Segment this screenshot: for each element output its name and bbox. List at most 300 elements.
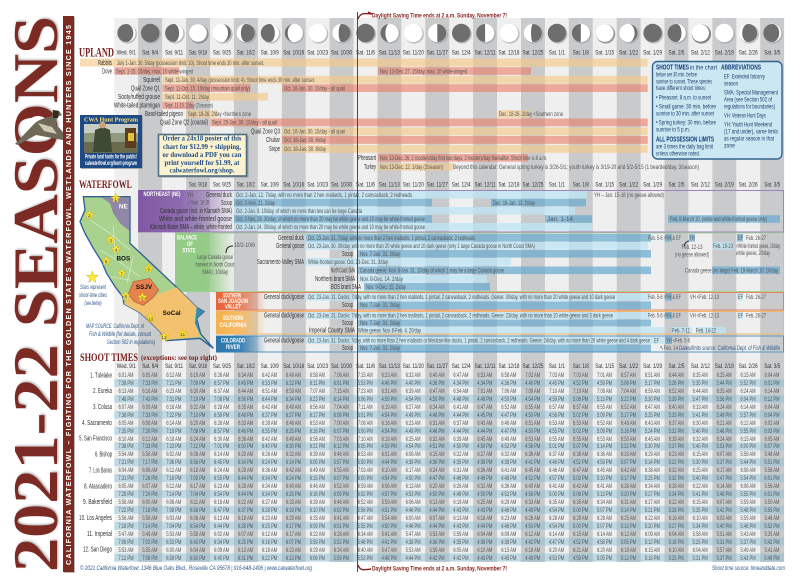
times: Tulelake: 4:45 PM — [549, 380, 565, 387]
times: Tulelake: 4:46 PM — [382, 380, 397, 387]
times: Colusa: 6:08 PM — [334, 412, 349, 419]
panel: southern california: White geese: Nov. 6-Feb. 4. 20/day — [358, 327, 422, 334]
upland labels and text: Rabbits — [98, 60, 112, 67]
times: Eureka: 5:39 PM — [669, 396, 684, 403]
times: Colusa: 6:59 PM — [214, 412, 230, 419]
panel: southern san joaquin valley: SAN JOAQUIN — [218, 299, 248, 305]
times: Atascadero: 6:20 AM — [430, 483, 445, 490]
times: Los Banos: 5:40 PM — [693, 475, 708, 482]
times: San Francisco: 7:01 PM — [214, 443, 230, 450]
times: Colusa: 6:42 AM — [262, 404, 277, 411]
times: Eureka: 7:15 AM — [334, 388, 349, 395]
times: Bishop: 6:14 AM — [214, 451, 229, 458]
times: Atascadero: 6:42 AM — [573, 483, 588, 490]
times: Sacramento: 6:23 AM — [406, 420, 421, 427]
times: Los Banos: 5:54 PM — [741, 475, 756, 482]
times: Imperial: 5:25 PM — [693, 539, 708, 546]
waterfowl date header: Sat. 1/29 — [643, 182, 662, 188]
times: San Diego: 5:59 PM — [334, 555, 349, 562]
times: Eureka: 5:47 PM — [693, 396, 708, 403]
times: Bishop: 4:39 PM — [406, 459, 421, 466]
times: Bakersfield: 6:00 AM — [143, 499, 158, 506]
times: Sacramento: 7:35 PM — [119, 428, 134, 435]
times: Los Angeles: 4:54 PM — [549, 523, 565, 530]
times: Bakersfield: 5:59 AM — [382, 499, 397, 506]
shoot times date header: Sat. 9/25 — [213, 363, 231, 370]
times: Atascadero: 6:09 PM — [334, 491, 349, 498]
times: Imperial: 6:43 PM — [190, 539, 206, 546]
times: Los Angeles: 5:07 PM — [597, 523, 612, 530]
times: San Francisco: 6:53 AM — [597, 436, 612, 442]
times: San Francisco: 7:33 PM — [143, 443, 158, 450]
times: Tulelake: 5:35 PM — [693, 380, 708, 387]
times: Eureka: 7:08 PM — [214, 396, 230, 403]
times: Colusa: 5:09 PM — [597, 412, 612, 419]
panel: balance of state: EF — [738, 235, 743, 242]
map: california hunting zones: 7 — [120, 271, 123, 276]
times: Los Banos: 6:18 AM — [191, 467, 206, 474]
times: Los Banos: 6:41 AM — [502, 467, 517, 474]
times: San Francisco: 6:56 AM — [310, 436, 325, 442]
times: Imperial: 6:15 AM — [573, 531, 588, 538]
times: Imperial: 6:34 PM — [214, 539, 230, 546]
times: San Francisco: 4:59 PM — [382, 443, 397, 450]
times: Colusa: 7:38 PM — [119, 412, 134, 419]
heading: waterfowl: WATERFOWL — [79, 177, 132, 191]
times: Colusa: 4:49 PM — [406, 412, 421, 419]
upland labels and text: Quail Zone Q1 — [131, 85, 160, 92]
times: Sacramento: 5:16 PM — [621, 428, 636, 435]
times: San Diego: 4:49 PM — [525, 555, 541, 562]
times: Colusa: 4:54 PM — [382, 412, 397, 419]
upland season bars — [80, 58, 648, 171]
times: Bishop: 5:57 PM — [334, 459, 349, 466]
upland date header: Sat. 2/12 — [691, 50, 710, 56]
callout: order poster — [158, 134, 248, 178]
times: Los Angeles: 6:17 PM — [286, 523, 301, 530]
times: San Francisco: 4:50 PM — [454, 443, 469, 450]
waterfowl date header: Sat. 10/30 — [331, 182, 352, 188]
times: Eureka: 5:30 PM — [645, 396, 660, 403]
times: Bakersfield: 6:52 AM — [358, 499, 373, 506]
times: Los Angeles: 6:29 AM — [286, 515, 301, 522]
times: Eureka: 6:24 AM — [741, 388, 756, 395]
panel: northeast — [138, 190, 783, 232]
times: Los Banos: 7:26 PM — [143, 475, 158, 482]
times: Los Angeles: 5:46 PM — [741, 523, 756, 530]
panel: northeast: NORTHEAST (NE) — [144, 192, 180, 198]
times: Los Angeles: 4:43 PM — [454, 523, 469, 530]
panel: southern california: SOUTHERN — [223, 316, 243, 322]
heading: shoot times: (exceptions: see top right) — [141, 353, 217, 362]
times: Sacramento: 6:43 AM — [645, 420, 660, 427]
panel: cwa hunt program: calwaterfowl.org/hunt-program — [85, 161, 137, 167]
times: Imperial: 6:07 PM — [286, 539, 301, 546]
times: Bakersfield: 6:29 AM — [502, 499, 517, 506]
panel: southern california: Scoup — [342, 320, 353, 327]
panel: shoot times and abbreviations: sunrise to 5 p.m. — [656, 126, 690, 133]
times: Colusa: 6:49 AM — [286, 404, 301, 411]
panel: balance of state: (no geese allowed) — [675, 252, 709, 258]
times: Bishop: 6:05 PM — [310, 459, 325, 466]
times: Los Banos: 4:47 PM — [430, 475, 445, 482]
times: Bakersfield: 6:19 PM — [286, 507, 301, 514]
shoot time city names: 12. San Diego — [83, 547, 112, 554]
times: San Francisco: 5:22 PM — [621, 443, 636, 450]
times: Eureka: 7:31 PM — [166, 396, 182, 403]
times: Tulelake: 5:44 PM — [717, 380, 732, 387]
upland labels and text: Sept. 11-19. 2/day (2/season) — [165, 102, 213, 109]
times: Atascadero: 6:14 AM — [717, 483, 732, 490]
times: Bakersfield: 6:34 AM — [597, 499, 612, 506]
times: San Francisco: 6:45 AM — [478, 436, 493, 442]
times: Eureka: 6:39 AM — [406, 388, 421, 395]
times: Eureka: 6:52 AM — [669, 388, 684, 395]
times: San Francisco: 6:39 AM — [669, 436, 684, 442]
times: Bishop: 6:15 AM — [693, 451, 708, 458]
times: Tulelake: 4:52 PM — [573, 380, 588, 387]
waterfowl date header: Sat. 1/22 — [619, 182, 638, 188]
panel: balance of state: White-fronted goose: Oct. 23-Dec. 31. 3/day — [308, 259, 389, 266]
times: Atascadero: 7:24 PM — [143, 491, 158, 498]
times: Tulelake: 7:33 PM — [143, 380, 158, 387]
times: Atascadero: 5:20 PM — [621, 491, 636, 498]
upland date header: Sat. 10/30 — [331, 50, 352, 56]
times: Bishop: 6:56 PM — [190, 459, 206, 466]
times: Bakersfield: 5:48 PM — [741, 507, 756, 514]
panel: southern california: Feb. 14-22 — [696, 327, 716, 334]
times: Los Angeles: 7:04 PM — [166, 523, 182, 530]
times: Los Banos: 5:47 PM — [717, 475, 732, 482]
times: Sacramento: 7:19 PM — [166, 428, 182, 435]
times: San Francisco: 6:24 AM — [717, 436, 732, 442]
times: Bakersfield: 6:35 AM — [573, 499, 588, 506]
times: San Diego: 5:37 PM — [717, 555, 732, 562]
times: Atascadero: 6:16 PM — [310, 491, 325, 498]
times: Imperial: 5:18 PM — [669, 539, 684, 546]
upland labels and text: Pheasant — [358, 155, 376, 162]
times: Tulelake: 4:34 PM — [478, 380, 493, 387]
times: Bishop: 5:07 PM — [621, 459, 636, 466]
shoot times date header: Sat. 1/1 — [549, 363, 565, 370]
times: Los Banos: 6:24 PM — [286, 475, 301, 482]
times: Atascadero: 6:44 PM — [238, 491, 253, 498]
times: Eureka: 7:10 AM — [573, 388, 588, 395]
times: San Francisco: 6:40 PM — [262, 443, 277, 450]
times: Sacramento: 6:48 AM — [502, 420, 517, 427]
panel: balance of state: Feb. 5-6 >YH & EF — [648, 235, 681, 242]
upland labels and text: Oct. 16-Jan. 30. 8/day — [284, 146, 327, 153]
times: Los Banos: 5:25 PM — [645, 475, 660, 482]
panel: shoot times and abbreviations: Area (see Section 502 of — [724, 96, 772, 103]
times: Los Angeles: 6:35 AM — [310, 515, 325, 522]
times: San Diego: 7:12 PM — [119, 555, 134, 562]
times: Tulelake: 6:45 PM — [238, 380, 253, 387]
times: Atascadero: 6:41 AM — [597, 483, 612, 490]
times: Tulelake: 7:38 PM — [119, 380, 134, 387]
map notes: Stars represent — [80, 285, 106, 291]
times: San Francisco: 6:05 AM — [765, 436, 780, 442]
times: Los Banos: 6:25 AM — [693, 467, 708, 474]
times: Colusa: 7:04 AM — [334, 404, 349, 411]
times: Atascadero: 5:27 PM — [645, 491, 660, 498]
times: Los Banos: 5:32 PM — [669, 475, 684, 482]
times: Colusa: 6:01 PM — [358, 412, 373, 419]
times: Tulelake: 7:15 AM — [358, 372, 373, 379]
times: Los Angeles: 6:22 AM — [645, 515, 660, 522]
waterfowl date header: Sat. 10/16 — [283, 182, 304, 188]
times: Imperial: 6:14 AM — [597, 531, 612, 538]
times: Bakersfield: 5:21 PM — [645, 507, 660, 514]
times: Los Angeles: 6:54 PM — [190, 523, 206, 530]
times: Eureka: 6:04 PM — [741, 396, 756, 403]
times: Bakersfield: 5:00 PM — [573, 507, 588, 514]
times: Sacramento: 6:46 AM — [286, 420, 301, 427]
panel: shoot times and abbreviations: as regular season in that — [724, 135, 774, 142]
times: Colusa: 4:46 PM — [430, 412, 445, 419]
times: San Francisco: 6:32 AM — [693, 436, 708, 442]
times: Los Banos: 4:50 PM — [406, 475, 421, 482]
times: Colusa: 6:27 PM — [286, 412, 301, 419]
times: Sacramento: 6:53 AM — [310, 420, 325, 427]
times: Los Angeles: 6:10 AM — [693, 515, 708, 522]
times: Atascadero: 6:07 AM — [143, 483, 158, 490]
times: Tulelake: 6:53 AM — [478, 372, 493, 379]
times: Tulelake: 7:03 AM — [549, 372, 564, 379]
times: Los Banos: 6:12 AM — [167, 467, 182, 474]
times: Imperial: 6:12 AM — [525, 531, 540, 538]
map notes: (see below) — [84, 301, 102, 307]
panel: shoot times and abbreviations: ABBREVIATIONS — [721, 64, 761, 71]
panel: northeast: Oct. 2-Jan. 14. 30/day, of which no more than 20 may be white geese and 10 may be white-fronted goose — [236, 224, 425, 231]
times: Sacramento: 7:00 AM — [334, 420, 349, 427]
times: Sacramento: 6:35 PM — [262, 428, 277, 435]
times: Los Banos: 4:57 PM — [549, 475, 565, 482]
times: Eureka: 5:13 PM — [597, 396, 612, 403]
map: california hunting zones: 5 — [105, 259, 108, 264]
times: Los Banos: 6:46 AM — [549, 467, 564, 474]
times: Los Banos: 6:17 AM — [406, 467, 421, 474]
times: Eureka: 6:44 AM — [238, 388, 253, 395]
times: San Francisco: 6:50 AM — [621, 436, 636, 442]
times: Los Banos: 6:17 AM — [717, 467, 732, 474]
times: Bakersfield: 4:51 PM — [382, 507, 397, 514]
times: Los Banos: 5:03 PM — [573, 475, 588, 482]
times: Bishop: 5:56 AM — [143, 451, 158, 458]
times: Colusa: 6:55 AM — [525, 404, 540, 411]
times: San Diego: 6:15 AM — [502, 547, 517, 554]
panel: shoot times and abbreviations: • Pheasant: 8 a.m. to sunset — [656, 94, 711, 101]
times: Los Banos: 6:04 AM — [119, 467, 134, 474]
times: Bakersfield: 4:43 PM — [454, 507, 469, 514]
times: Tulelake — [118, 372, 780, 387]
times: Colusa: 5:49 PM — [717, 412, 732, 419]
map: california hunting zones: 1 — [114, 196, 117, 201]
times: San Francisco: 6:05 PM — [358, 443, 373, 450]
times: San Diego: 6:10 AM — [478, 547, 493, 554]
times: Sacramento: 7:08 AM — [358, 420, 373, 427]
upland labels and text: Oct. 16-Jan. 30. 10/day - all quail — [284, 128, 345, 136]
panel: balance of state — [175, 233, 784, 292]
times: San Diego: 6:34 AM — [334, 547, 349, 554]
panel: southern san joaquin valley: Oct. 23-Jan. 31. Ducks: 7/day, with no more than 2 hen mallards, 1 pintail, 2 canvasback, 2 redheads. Geese: 30/day, with no more than 20 white geese and 10 dark geese — [308, 294, 615, 301]
shoot times date header: Sat. 12/18 — [498, 363, 520, 370]
times: Los Banos: 6:49 AM — [310, 467, 325, 474]
times: Los Banos: 6:24 AM — [430, 467, 445, 474]
times: Sacramento: 6:33 AM — [238, 420, 253, 427]
panel: southern san joaquin valley: Feb. 5-6 >YH & EF — [648, 294, 681, 301]
callout: order poster: chart for $12.99 + shipping, — [163, 144, 241, 151]
times: Eureka: 4:59 PM — [549, 396, 565, 403]
panel: balance of state: Feb. 26-27 — [746, 235, 766, 242]
times: San Diego: 5:57 AM — [717, 547, 732, 554]
waterfowl date header: Sat. 2/19 — [715, 182, 734, 188]
times: Atascadero: 6:28 AM — [669, 483, 684, 490]
times: San Diego: 4:53 PM — [549, 555, 565, 562]
times: Bishop: 4:35 PM — [454, 459, 469, 466]
times: Sacramento: 6:14 AM — [167, 420, 182, 427]
panel: northeast: White and white-fronted goose — [159, 216, 232, 223]
upland labels and text: Sept. 18-26. 2/day <Northern zone — [188, 111, 251, 118]
shoot times date header: Sat. 12/11 — [475, 363, 496, 370]
times: Los Banos: 5:17 PM — [621, 475, 636, 482]
times: Los Angeles: 6:23 AM — [262, 515, 277, 522]
panel: southern san joaquin valley — [216, 292, 784, 310]
times: Los Angeles: 6:09 PM — [310, 523, 325, 530]
times: Colusa: 6:55 AM — [597, 404, 612, 411]
times: Colusa: 6:04 AM — [765, 404, 780, 411]
times: Colusa: 5:33 PM — [669, 412, 684, 419]
times: Bishop: 5:58 AM — [741, 451, 756, 458]
times: Imperial: 5:53 AM — [430, 531, 445, 538]
times: Eureka: 6:34 PM — [286, 396, 301, 403]
times: Tulelake: 5:52 PM — [741, 380, 756, 387]
times: Imperial: 6:14 AM — [549, 531, 564, 538]
times: Imperial: 5:41 AM — [382, 531, 397, 538]
times: San Diego: 5:43 PM — [741, 555, 756, 562]
times: Los Banos: 6:38 AM — [645, 467, 660, 474]
times: Colusa: 6:41 AM — [454, 404, 469, 411]
times: Eureka: 6:31 AM — [382, 388, 397, 395]
times: Tulelake: 6:40 AM — [430, 372, 445, 379]
times: Atascadero: 6:22 AM — [693, 483, 708, 490]
times: Imperial: 4:41 PM — [382, 539, 397, 546]
times: Imperial: 5:58 AM — [693, 531, 708, 538]
times: Tulelake: 4:59 PM — [597, 380, 612, 387]
times: Atascadero: 5:48 PM — [717, 491, 732, 498]
times: Los Angeles: 7:14 PM — [143, 523, 158, 530]
times: Atascadero: 4:50 PM — [430, 491, 445, 498]
panel: colorado river: General duck/goose — [264, 338, 304, 344]
times: Atascadero: 5:06 PM — [573, 491, 588, 498]
times: Los Banos: 6:42 AM — [621, 467, 636, 474]
times: Bakersfield: 5:28 PM — [669, 507, 684, 514]
times: Los Angeles: 4:44 PM — [430, 523, 445, 530]
times: Sacramento: 4:47 PM — [501, 428, 517, 435]
times: Tulelake: 6:23 AM — [382, 372, 397, 379]
upland labels and text: July 1-Jan. 30. 5/day (possession limit: 10). Shoot time ends 30 min. after sunset. — [117, 60, 264, 67]
times: San Diego: 5:25 PM — [669, 555, 684, 562]
times: San Diego: 6:20 AM — [597, 547, 612, 554]
times: Bakersfield: 6:19 AM — [454, 499, 469, 506]
upland date header: Wed. 9/1 — [117, 50, 136, 56]
times: San Diego: 5:53 AM — [119, 547, 134, 554]
times: San Diego: 5:41 AM — [765, 547, 780, 554]
moon phases — [117, 24, 783, 44]
upland date header: Sat. 1/1 — [549, 50, 565, 56]
times: Tulelake: 7:02 AM — [525, 372, 540, 379]
panel: shoot times and abbreviations: sunrise to 30 min. after sunset — [656, 110, 714, 117]
times: Bakersfield: 6:13 AM — [430, 499, 445, 506]
times: Bakersfield: 6:35 AM — [549, 499, 564, 506]
times: Tulelake: 6:12 AM — [167, 372, 182, 379]
times: Tulelake: 6:04 AM — [765, 372, 780, 379]
map: california hunting zones: 9 — [141, 295, 144, 300]
times: Bishop: 6:37 AM — [549, 451, 564, 458]
times: Los Banos: 6:47 AM — [573, 467, 588, 474]
times: Eureka: 7:09 AM — [525, 388, 540, 395]
times: Colusa: 6:57 AM — [573, 404, 588, 411]
times: Sacramento: 4:50 PM — [525, 428, 541, 435]
times: Bishop: 6:46 AM — [334, 451, 349, 458]
times: Los Angeles: 5:40 PM — [717, 523, 732, 530]
times: Los Angeles: 5:56 AM — [119, 515, 134, 522]
times: Bishop: 6:27 AM — [478, 451, 493, 458]
times: Los Banos: 6:24 AM — [214, 467, 229, 474]
times: Imperial: 6:12 AM — [621, 531, 636, 538]
times: Los Banos: 4:48 PM — [501, 475, 517, 482]
times: Sacramento: 7:30 PM — [143, 428, 158, 435]
times: Los Banos: 6:44 PM — [238, 475, 253, 482]
times: Sacramento: 6:31 AM — [430, 420, 445, 427]
upland labels and text: Turkey — [364, 164, 376, 171]
times: Bakersfield: 6:27 AM — [262, 499, 277, 506]
shoot times date header: Sat. 10/2 — [237, 363, 255, 370]
times: Sacramento: 6:08 AM — [143, 420, 158, 427]
times: Tulelake: 6:32 AM — [406, 372, 421, 379]
times: San Francisco: 7:10 AM — [358, 436, 373, 442]
times: San Francisco: 6:18 AM — [382, 436, 397, 442]
times: San Francisco: 6:30 PM — [286, 443, 301, 450]
times: San Francisco: 6:45 AM — [645, 436, 660, 442]
times: Colusa: 6:35 AM — [238, 404, 253, 411]
times: Bakersfield: 6:28 PM — [262, 507, 277, 514]
times: Bishop: 6:36 AM — [525, 451, 540, 458]
times: San Francisco: 4:51 PM — [430, 443, 445, 450]
map: california hunting zones: SSJV — [136, 284, 153, 291]
waterfowl date header — [189, 182, 780, 188]
times: Imperial: 6:16 PM — [262, 539, 277, 546]
times: San Diego: 5:53 AM — [406, 547, 421, 554]
times: Bakersfield: 5:56 PM — [358, 507, 373, 514]
panel: shoot times and abbreviations — [652, 62, 782, 159]
map notes: Section 502 in regulations) — [107, 340, 155, 346]
times: Eureka: 6:23 AM — [167, 388, 182, 395]
times: Imperial: 6:09 AM — [502, 531, 517, 538]
times: Colusa: 5:02 PM — [573, 412, 588, 419]
times: Bishop: 4:46 PM — [549, 459, 565, 466]
times: San Francisco: 6:42 AM — [262, 436, 277, 442]
times: Los Angeles: 6:25 PM — [262, 523, 277, 530]
times: Bishop: 6:32 AM — [502, 451, 517, 458]
times: Los Angeles: 6:47 AM — [358, 515, 373, 522]
times: Bakersfield: 6:31 AM — [621, 499, 636, 506]
times: San Francisco: 6:39 AM — [454, 436, 469, 442]
times: Atascadero: 5:13 PM — [597, 491, 612, 498]
times: Sacramento: 5:09 PM — [597, 428, 612, 435]
panel: southern san joaquin valley: Feb. 26-27 — [746, 294, 766, 301]
upland labels and text: Band-tailed pigeon — [145, 111, 183, 118]
